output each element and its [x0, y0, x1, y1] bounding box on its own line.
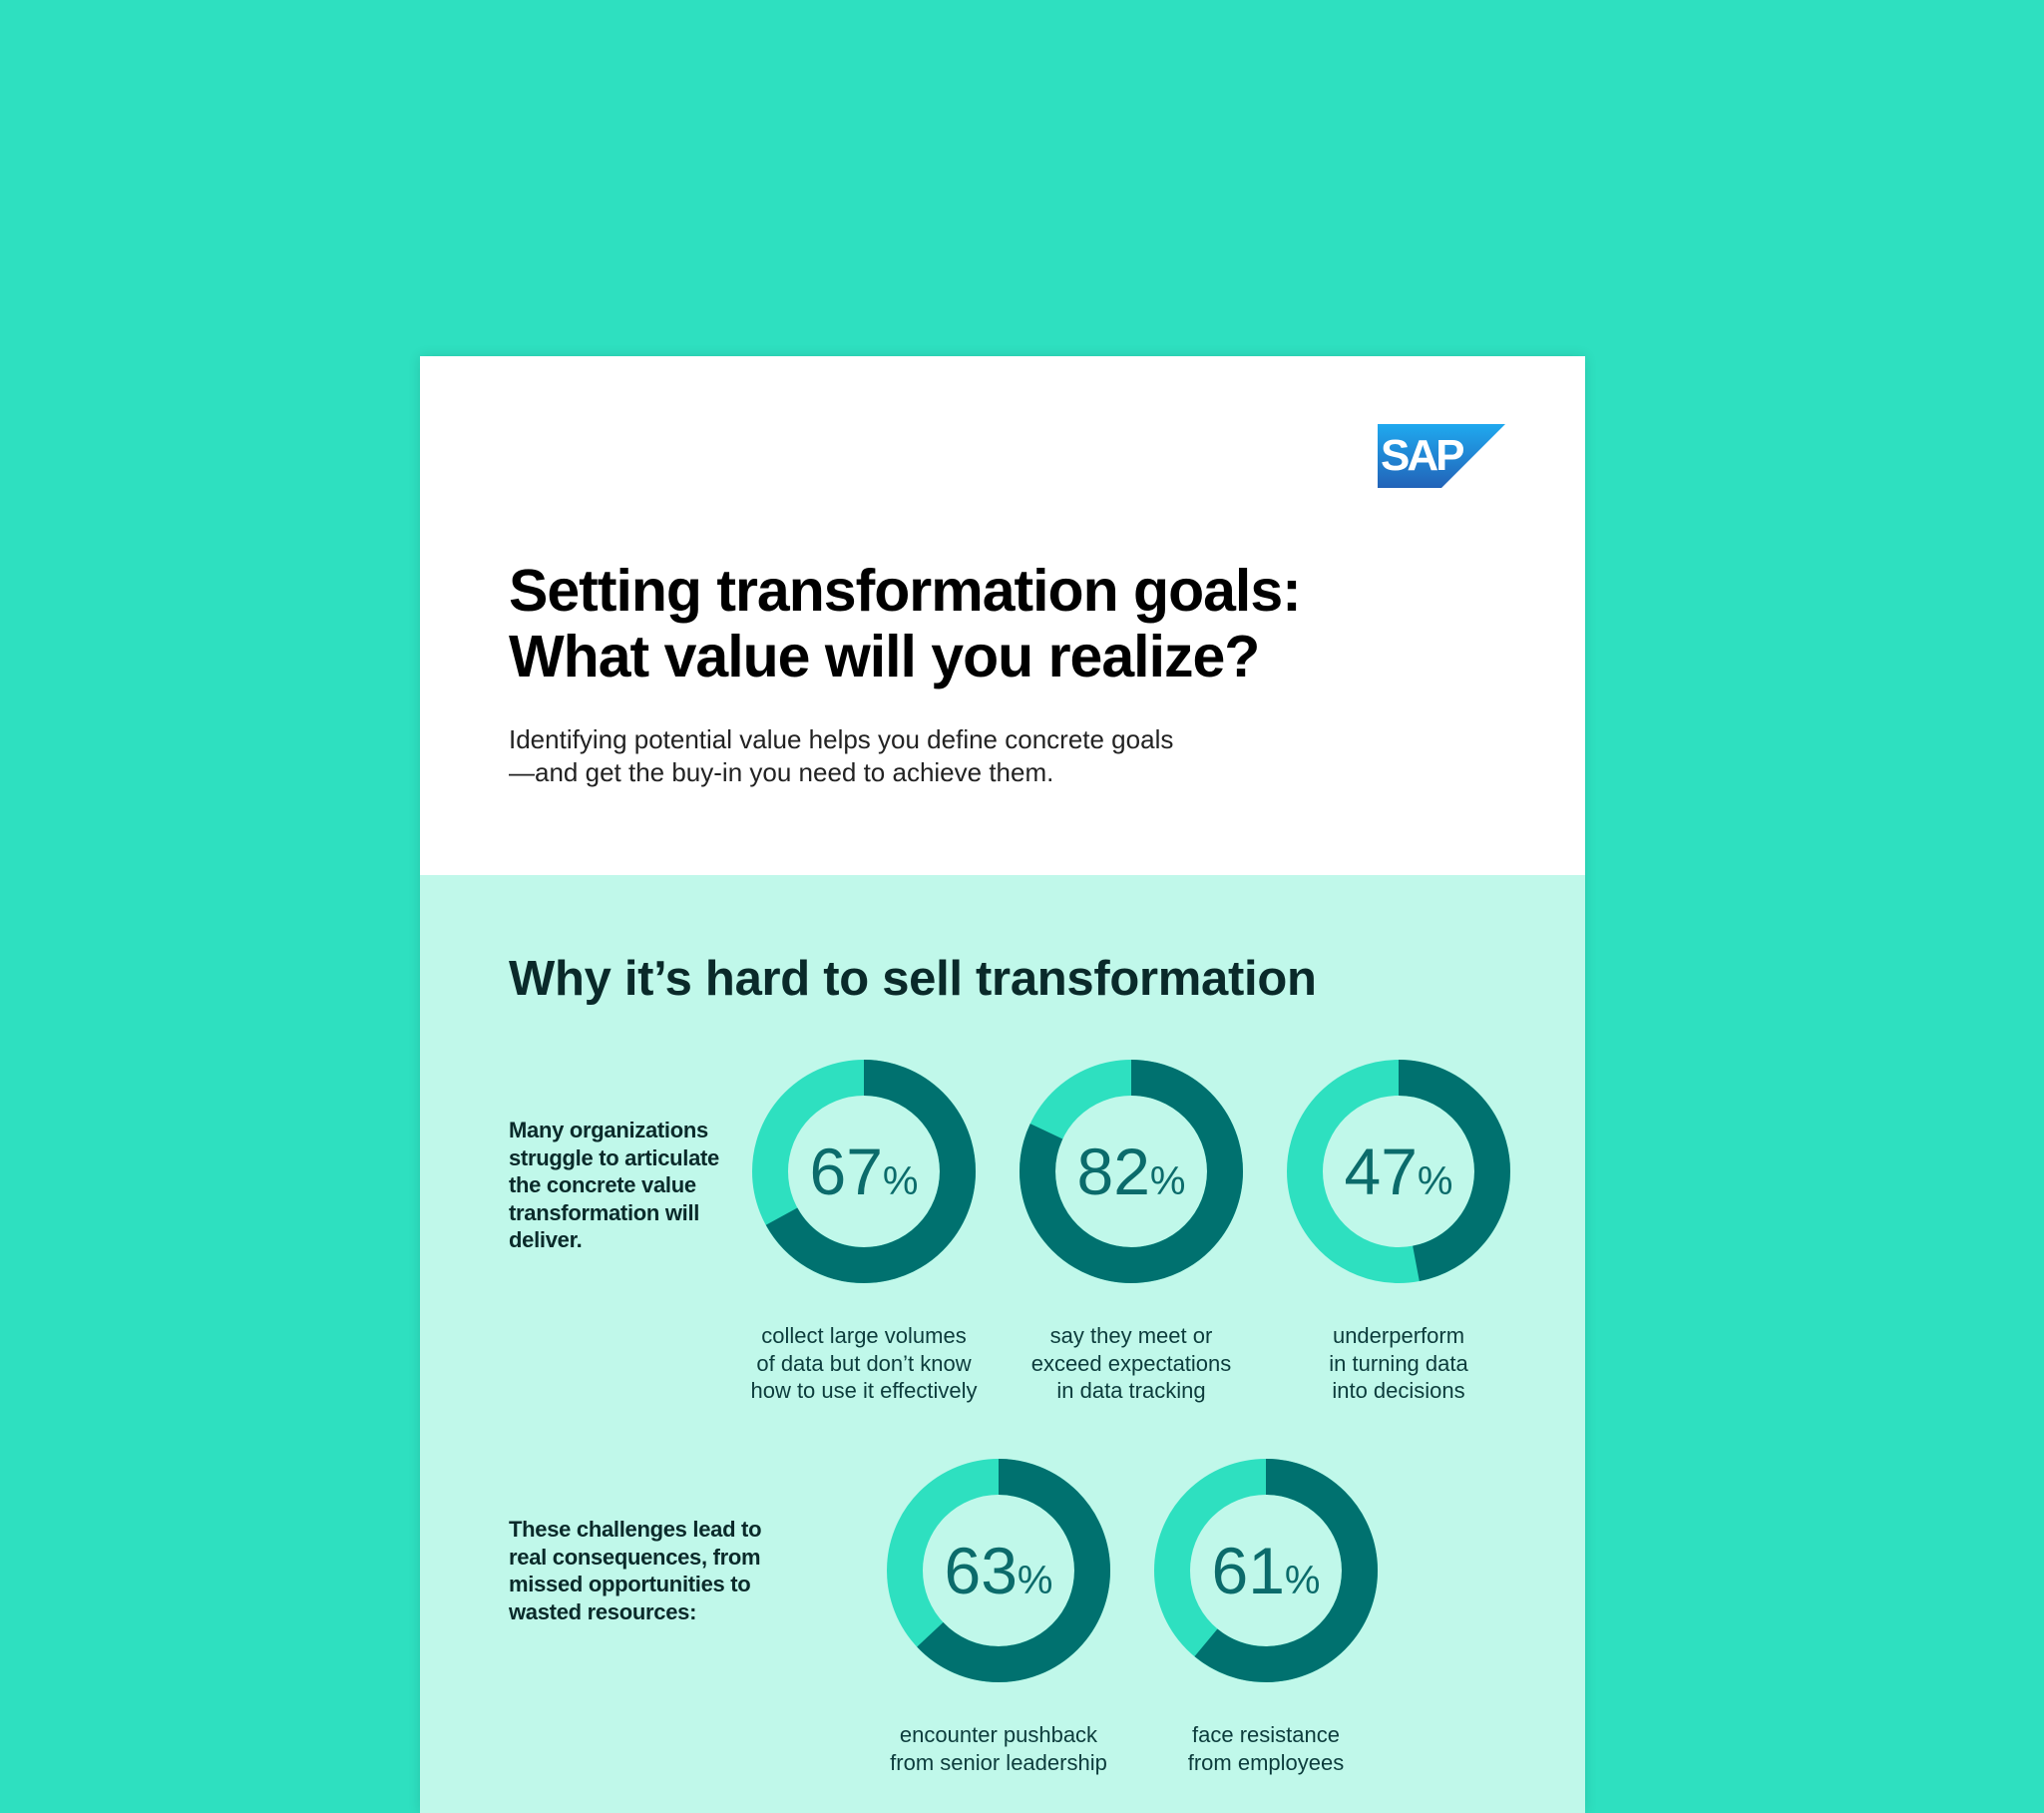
card: [420, 356, 1585, 1813]
title: What value will you realize?: [509, 624, 1259, 689]
caption 67: of data but don’t know: [756, 1351, 972, 1375]
lead text row 1: struggle to articulate: [509, 1145, 719, 1169]
caption 63: encounter pushback: [900, 1722, 1097, 1747]
donut 63%: 63%: [944, 1534, 1053, 1607]
lead text row 1: Many organizations: [509, 1118, 708, 1142]
donut charts: [752, 1060, 1510, 1682]
donut 61%: 61%: [1211, 1534, 1321, 1607]
heading: why hard: Why it’s hard to sell transformation: [509, 952, 1317, 1006]
caption 82: exceed expectations: [1031, 1351, 1231, 1375]
caption 47: into decisions: [1332, 1378, 1465, 1403]
donut 61%: [1172, 1477, 1360, 1664]
caption 82: in data tracking: [1056, 1378, 1206, 1403]
caption 61: from employees: [1188, 1750, 1344, 1774]
donut 82%: 82%: [1077, 1134, 1185, 1208]
caption 82: [1031, 1323, 1231, 1403]
caption 47: underperform: [1333, 1323, 1464, 1348]
subtitle: —and get the buy-in you need to achieve them.: [509, 757, 1053, 787]
title: [509, 558, 1301, 689]
caption 67: [750, 1323, 978, 1403]
donut 63%: [905, 1477, 1092, 1664]
donut 82%: [1037, 1078, 1225, 1265]
lead text row 2: [509, 1517, 761, 1624]
caption 82: say they meet or: [1050, 1323, 1212, 1348]
lead text row 2: real consequences, from: [509, 1545, 760, 1569]
title: Setting transformation goals:: [509, 558, 1301, 624]
caption 63: [890, 1722, 1107, 1774]
SAP logo: SAP: [1381, 431, 1463, 480]
lead text row 2: missed opportunities to: [509, 1572, 750, 1596]
caption 67: collect large volumes: [761, 1323, 967, 1348]
donut 67%: 67%: [810, 1134, 918, 1208]
lead text row 1: [509, 1118, 719, 1252]
caption 67: how to use it effectively: [750, 1378, 978, 1403]
lead text row 2: wasted resources:: [509, 1598, 696, 1624]
white header section: [420, 356, 1585, 875]
lead text row 1: deliver.: [509, 1227, 582, 1252]
caption 47: [1329, 1323, 1468, 1403]
donut 67%: [770, 1078, 958, 1265]
donut 47%: 47%: [1345, 1134, 1452, 1208]
SAP logo: [1378, 424, 1505, 488]
lead text row 1: the concrete value: [509, 1172, 696, 1197]
lead text row 1: transformation will: [509, 1199, 699, 1225]
subtitle: Identifying potential value helps you define concrete goals: [509, 724, 1173, 754]
donut 47%: [1305, 1078, 1492, 1265]
caption 61: [1188, 1722, 1344, 1774]
caption 47: in turning data: [1329, 1351, 1468, 1375]
caption 63: from senior leadership: [890, 1750, 1107, 1774]
subtitle: [509, 724, 1173, 787]
lead text row 2: These challenges lead to: [509, 1517, 761, 1542]
caption 61: face resistance: [1192, 1722, 1340, 1747]
